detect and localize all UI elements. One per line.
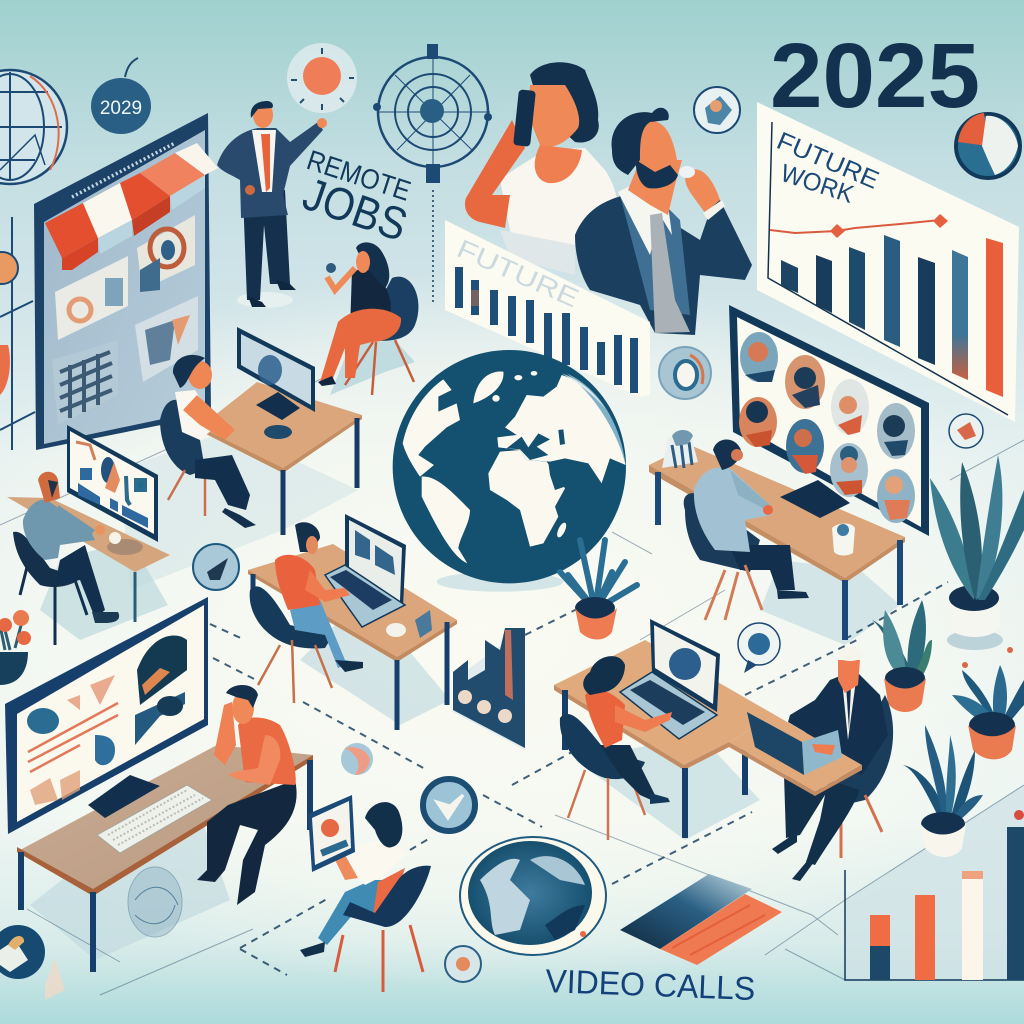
woman xyxy=(560,656,672,840)
plant: cactus pot right xyxy=(952,647,1024,759)
icon: small medallion xyxy=(694,87,740,133)
workstation: man at small monitor xyxy=(7,425,170,645)
store picture: abstract xyxy=(135,296,198,382)
badge: 2029 bomb: 2029 xyxy=(100,98,142,119)
icon: faint sketched globe xyxy=(128,867,182,937)
floor lines and shadows xyxy=(0,190,1024,995)
chart title: FUTURE xyxy=(773,127,883,195)
title: 2025: 2025 xyxy=(770,25,980,127)
Eurasia xyxy=(497,375,626,483)
plant: white pot front xyxy=(903,725,983,857)
desk top behind video monitor xyxy=(649,445,905,640)
bars xyxy=(781,235,1003,397)
store picture: mug xyxy=(55,256,128,340)
panel: storefront xyxy=(34,113,218,450)
text: REMOTE JOBS xyxy=(297,144,414,251)
bar: cream xyxy=(962,871,983,980)
store sign text strip xyxy=(72,143,175,197)
plant: agave by globe xyxy=(560,540,637,640)
icon: circular badge left xyxy=(193,544,239,590)
trend line xyxy=(770,214,948,238)
workstation: person at laptop xyxy=(248,514,457,730)
left edge shelving xyxy=(0,217,35,450)
North America xyxy=(403,379,460,477)
chart: mini bars panel xyxy=(453,628,525,750)
desk front and man's laptop xyxy=(729,712,862,796)
South America xyxy=(422,477,470,563)
Mediterranean xyxy=(507,433,550,460)
store picture: calendar grid xyxy=(52,340,118,425)
text: REMOTE JOBS: JOBS xyxy=(297,167,414,251)
icon: lens badge xyxy=(659,347,711,399)
Greenland xyxy=(473,372,503,403)
icon: orb on floor xyxy=(341,743,373,775)
panel: video call monitor xyxy=(729,305,929,536)
panel: faded future chart: FUTURE xyxy=(453,233,584,313)
badge: 2029 bomb xyxy=(91,58,151,134)
workstation: woman with tablet xyxy=(300,795,431,992)
bar chart: bottom right xyxy=(845,810,1024,980)
bar: orange xyxy=(915,895,935,980)
workstation: big monitor desk with man xyxy=(5,597,313,972)
icon: wireframe globe top left xyxy=(0,70,67,184)
Africa xyxy=(488,450,565,547)
laptop xyxy=(620,619,720,739)
badge: globe ring xyxy=(460,837,606,955)
workstation: woman at desktop monitor xyxy=(160,327,362,535)
video portraits xyxy=(739,332,915,523)
workstation: woman at shared desk xyxy=(554,619,775,840)
plant: orange pot middle xyxy=(872,600,932,712)
bar: split orange and navy xyxy=(870,915,890,980)
panel: navy and orange rug xyxy=(620,874,782,965)
globe xyxy=(393,350,626,592)
keyboard xyxy=(97,785,212,853)
icon: portrait badge xyxy=(949,414,983,448)
text: VIDEO CALLS: VIDEO CALLS xyxy=(545,962,756,1007)
big monitor xyxy=(5,597,208,834)
person: woman seated on chair xyxy=(318,242,418,395)
icon: check badge xyxy=(423,779,475,831)
plant: flowers left xyxy=(0,610,31,685)
man xyxy=(197,685,297,905)
text: REMOTE JOBS: REMOTE xyxy=(303,144,414,207)
icon: speech bubble xyxy=(738,623,780,673)
awning xyxy=(45,143,218,270)
icon: small lens badge bottom xyxy=(445,946,481,982)
person: bearded man in suit xyxy=(575,108,752,335)
workstation: man at video monitor xyxy=(662,430,855,620)
icon: bottom-left circular badge xyxy=(0,925,65,1000)
icon: sun xyxy=(287,43,357,113)
person: man in suit at shared desk xyxy=(772,647,893,881)
islands xyxy=(514,375,522,380)
store picture: swirl xyxy=(137,215,195,292)
plant: tall white pot xyxy=(930,455,1024,650)
bar: navy xyxy=(1007,827,1024,980)
chart title: WORK xyxy=(777,159,857,209)
icon: pie chart xyxy=(956,113,1020,178)
panel: faded future chart xyxy=(445,220,650,397)
person: woman on the phone xyxy=(465,62,618,275)
person: standing man in suit xyxy=(217,101,327,308)
panel: future work chart xyxy=(757,102,1019,422)
icon: radar target xyxy=(374,45,491,182)
